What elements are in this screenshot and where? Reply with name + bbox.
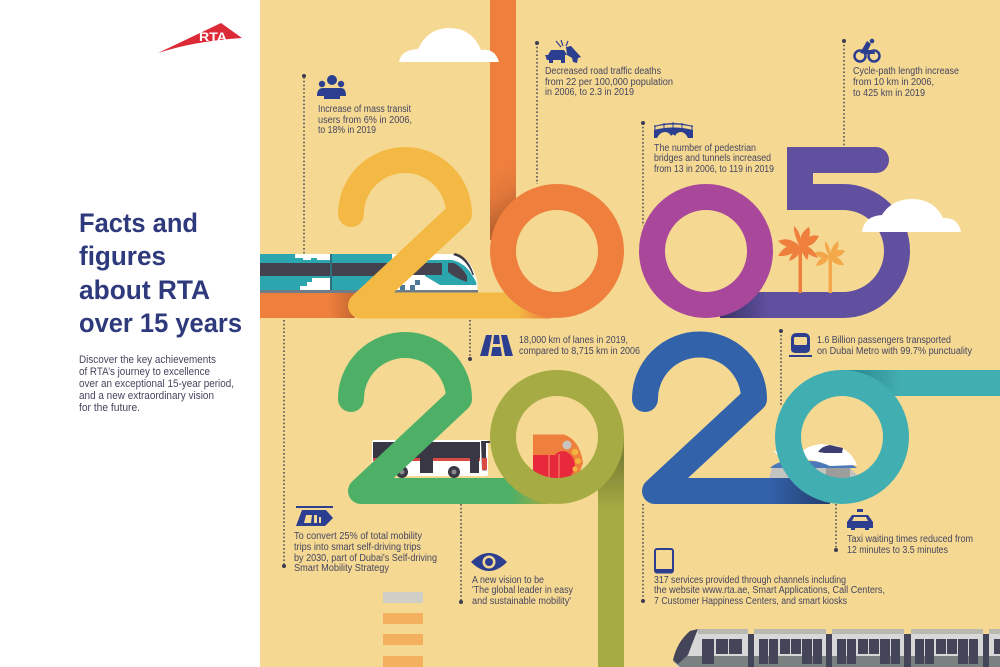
title [79, 208, 242, 338]
digit: yellow 2 [351, 160, 548, 306]
text: metro passengers [817, 335, 972, 357]
text: bridges and tunnels: bridges and tunnels increased [654, 153, 771, 164]
text: taxi waiting [847, 534, 973, 556]
panel: sand background [260, 0, 1000, 667]
intro text [79, 354, 234, 414]
intro text: and a new extraordinary vision [79, 390, 214, 402]
text: road traffic deaths: Decreased road traffic deaths [545, 66, 661, 77]
text: road traffic deaths: in 2006, to 2.3 in 2019 [545, 87, 634, 98]
digit: blue 2 [645, 344, 770, 491]
title: figures [79, 241, 166, 271]
icon: tablet [655, 549, 673, 572]
road: orange lead-in [260, 293, 355, 318]
leader lines [282, 39, 846, 604]
text: mass transit users: Increase of mass transit [318, 104, 411, 115]
title: Facts and [79, 208, 198, 238]
text: road traffic deaths: from 22 per 100,000 population [545, 77, 673, 88]
text: mass transit users: users from 6% in 2006, [318, 115, 412, 126]
icon: pedestrian bridge [654, 122, 693, 138]
text: road traffic deaths [545, 66, 673, 98]
text: self-driving strategy: Smart Mobility Strategy [294, 563, 389, 574]
icon: car crash [545, 40, 581, 63]
icon: metro front [789, 333, 812, 357]
text: self-driving strategy [294, 531, 437, 574]
text: services: the website www.rta.ae, Smart Applications, Call Centers, [654, 585, 885, 596]
text: metro passengers: on Dubai Metro with 99.7% punctuality [817, 346, 972, 357]
Dubai RTA vision emblem [533, 434, 583, 478]
icon: road lanes [480, 335, 513, 356]
digit stem: orange vertical [490, 0, 516, 240]
intro text: for the future. [79, 402, 140, 414]
digit: olive vertical [598, 437, 624, 667]
RTA logo: RTA [199, 32, 227, 44]
text: cycle path: from 10 km in 2006, [853, 77, 934, 88]
text: services: 317 services provided through channels including [654, 575, 846, 586]
text: new vision: and sustainable mobility' [472, 596, 571, 607]
text: services: 7 Customer Happiness Centers, and smart kiosks [654, 596, 847, 607]
text: bridges and tunnels: The number of pedestrian [654, 143, 756, 154]
text: cycle path: to 425 km in 2019 [853, 88, 925, 99]
intro text: of RTA’s journey to excellence [79, 366, 210, 378]
bullet train: autonomous pod [769, 444, 860, 478]
metro train at bottom [673, 629, 1000, 667]
icon: self-driving pod [296, 506, 333, 526]
digit: olive 0 [503, 383, 611, 491]
text: new vision: 'The global leader in easy [472, 585, 573, 596]
text: taxi waiting: Taxi waiting times reduced from [847, 534, 973, 545]
cloud: right [862, 199, 961, 232]
text: metro passengers: 1.6 Billion passengers transported [817, 335, 951, 346]
text: new vision [472, 575, 573, 607]
icon: cyclist [854, 39, 880, 62]
title: about RTA [79, 275, 210, 305]
intro text: over an exceptional 15-year period, [79, 378, 234, 390]
text: services [654, 575, 885, 607]
palm trees [778, 226, 845, 293]
icon: eye [471, 553, 507, 571]
digit: teal bar [842, 370, 1000, 396]
digit: green 2 [351, 345, 548, 491]
text: self-driving strategy: To convert 25% of total mobility [294, 531, 422, 542]
text: cycle path [853, 66, 959, 99]
text: taxi waiting: 12 minutes to 3.5 minutes [847, 545, 948, 556]
text: mass transit users: to 18% in 2019 [318, 125, 376, 136]
text: lanes: 18,000 km of lanes in 2019, [519, 335, 628, 346]
text: mass transit users [318, 104, 412, 136]
cloud: top left [399, 28, 499, 62]
text: self-driving strategy: by 2030, part of Dubai's Self-driving [294, 553, 437, 564]
bus [372, 440, 490, 478]
icon: people [317, 75, 346, 99]
text: lanes: compared to 8,715 km in 2006 [519, 346, 641, 357]
text: self-driving strategy: trips into smart self-driving trips [294, 542, 421, 553]
text: new vision: A new vision to be [472, 575, 545, 586]
text: lanes [519, 335, 641, 357]
digit: orange 0 [503, 197, 611, 305]
icon: taxi [847, 509, 873, 530]
panel: left white column [0, 0, 260, 667]
digit: purple 5 [720, 147, 897, 318]
digit: teal 0 [788, 383, 896, 491]
RTA logo [158, 23, 242, 53]
text: bridges and tunnels [654, 143, 774, 175]
intro text: Discover the key achievements [79, 354, 216, 366]
tram: teal Dubai tram [260, 253, 478, 293]
dashed road markings [383, 592, 423, 667]
title: over 15 years [79, 308, 242, 338]
digit: purple 0 [652, 197, 760, 305]
text: cycle path: Cycle-path length increase [853, 66, 959, 77]
text: bridges and tunnels: from 13 in 2006, to 119 in 2019 [654, 164, 774, 175]
